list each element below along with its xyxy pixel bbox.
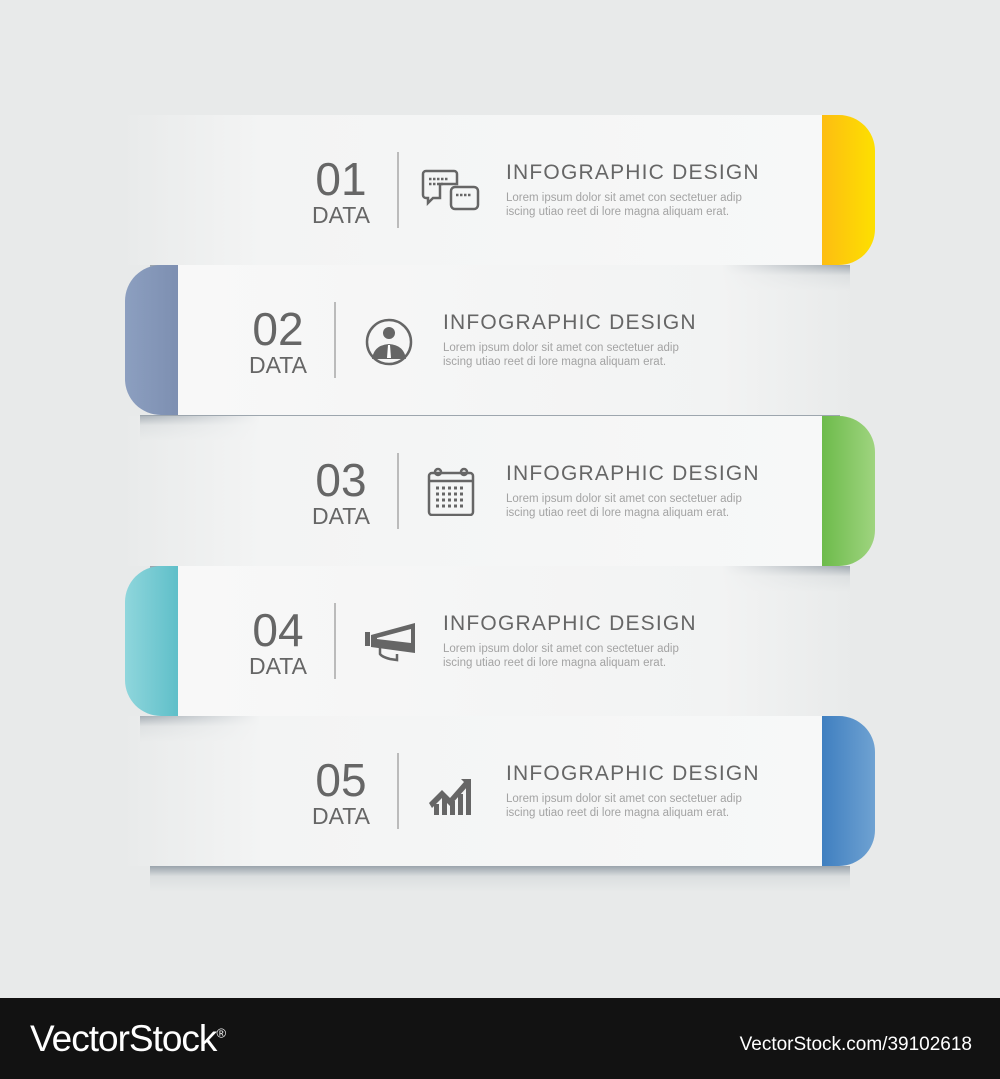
label DATA: DATA [312, 503, 370, 529]
body text: Lorem ipsum dolor sit amet con sectetuer adip [443, 342, 679, 354]
footer bar [0, 998, 1000, 1079]
title: INFOGRAPHIC DESIGN [443, 311, 697, 334]
tab: green [822, 416, 875, 566]
label DATA: DATA [312, 202, 370, 228]
row 3 [140, 416, 875, 582]
number 05: 05 [315, 754, 367, 806]
icon: megaphone [365, 623, 415, 662]
label DATA: DATA [312, 803, 370, 829]
label DATA: DATA [249, 653, 307, 679]
title: INFOGRAPHIC DESIGN [506, 762, 760, 785]
body text [506, 793, 742, 819]
body text [506, 493, 742, 519]
icon: person [366, 318, 412, 366]
tab: slate blue [125, 265, 178, 415]
body text: Lorem ipsum dolor sit amet con sectetuer adip [506, 493, 742, 505]
body text: Lorem ipsum dolor sit amet con sectetuer adip [506, 793, 742, 805]
number 03: 03 [315, 454, 367, 506]
image id: VectorStock.com/39102618 [740, 1034, 972, 1055]
tab: blue [822, 716, 875, 866]
body text: iscing utiao reet di lore magna aliquam erat. [443, 356, 666, 368]
body text [506, 192, 742, 218]
title: INFOGRAPHIC DESIGN [443, 612, 697, 635]
number 04: 04 [252, 604, 304, 656]
body text: iscing utiao reet di lore magna aliquam erat. [506, 206, 729, 218]
row 4 [125, 566, 845, 730]
number 02: 02 [252, 303, 304, 355]
logo: VectorStock® [30, 1018, 225, 1059]
title: INFOGRAPHIC DESIGN [506, 462, 760, 485]
icon: growth chart [429, 779, 471, 815]
icon: calendar [428, 468, 474, 516]
body text: iscing utiao reet di lore magna aliquam erat. [443, 657, 666, 669]
row 5 [140, 716, 875, 882]
row 2 [125, 265, 845, 430]
body text: Lorem ipsum dolor sit amet con sectetuer adip [506, 192, 742, 204]
body text: iscing utiao reet di lore magna aliquam erat. [506, 507, 729, 519]
tab: cyan [125, 566, 178, 716]
tab: yellow [822, 115, 875, 265]
body text [443, 342, 679, 368]
number 01: 01 [315, 153, 367, 205]
title: INFOGRAPHIC DESIGN [506, 161, 760, 184]
body text [443, 643, 679, 669]
body text: iscing utiao reet di lore magna aliquam erat. [506, 807, 729, 819]
icon: chat bubbles [422, 170, 480, 210]
label DATA: DATA [249, 352, 307, 378]
row 1 [150, 115, 875, 281]
body text: Lorem ipsum dolor sit amet con sectetuer adip [443, 643, 679, 655]
